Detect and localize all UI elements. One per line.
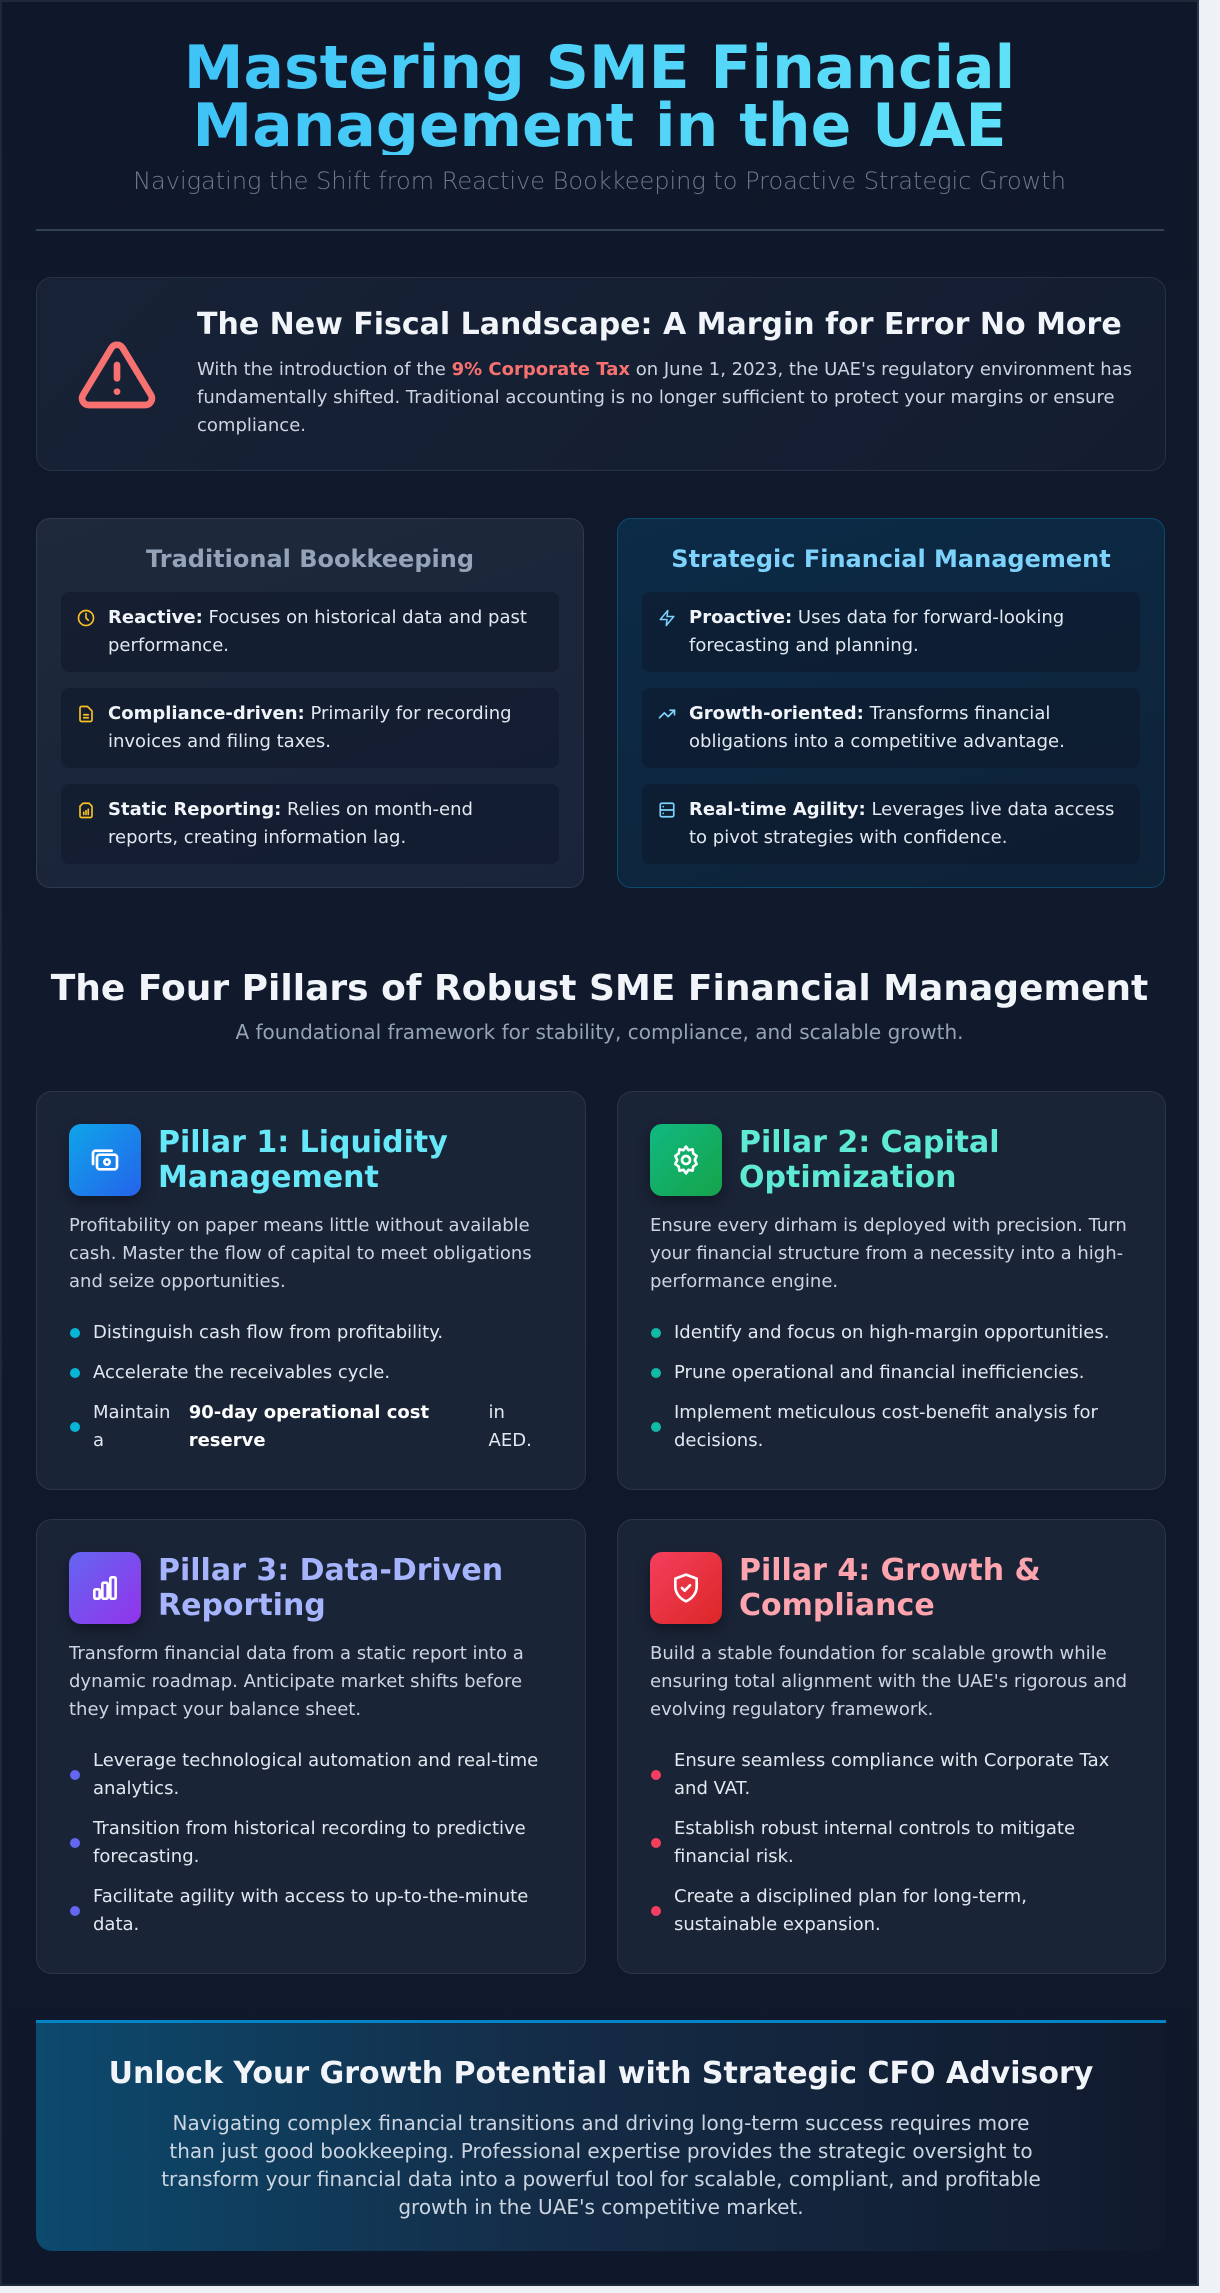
icon: warning triangle — [78, 342, 156, 408]
pillar 2 header — [648, 1124, 1000, 1204]
bullets: growth: Ensure seamless compliance with Corporate Tax and VAT. — [674, 1750, 1109, 1799]
title: Mastering SME Financial — [184, 33, 1015, 103]
subheading: framework: A foundational framework for stability, compliance, and scalable growth. — [235, 1020, 964, 1044]
item: real-time agility — [642, 784, 1140, 864]
icon: shield check — [650, 1552, 722, 1624]
bullets: liquidity: in AED. — [489, 1402, 532, 1451]
pillar 2 header: Optimization — [739, 1160, 956, 1195]
bullets: capital — [651, 1322, 1109, 1451]
bullets: reporting: Leverage technological automation and real-time analytics. — [93, 1750, 538, 1799]
item: static reporting: Static Reporting: Relies on month-end reports, creating information lag. — [108, 799, 473, 848]
icon: bar chart — [69, 1552, 141, 1624]
pillar 2 header: Pillar 2: Capital — [739, 1125, 1000, 1160]
panel: strategic financial management — [617, 518, 1165, 888]
item: real-time agility: Real-time Agility: Leverages live data access to pivot strategies with confidence. — [689, 799, 1114, 848]
bullets: growth: Establish robust internal controls to mitigate financial risk. — [674, 1818, 1075, 1867]
bullets: growth — [651, 1750, 1109, 1935]
pillar 4 header — [648, 1552, 1041, 1632]
text: liquidity description: Profitability on paper means little without available cash. Master the flow of capital to meet obligations and seize opportunities. — [69, 1215, 532, 1292]
pillar 3 header — [68, 1552, 503, 1632]
bullets: reporting: Transition from historical recording to predictive forecasting. — [93, 1818, 526, 1867]
bullets: capital: Prune operational and financial inefficiencies. — [674, 1362, 1084, 1383]
panel: pillar 4 growth — [617, 1519, 1166, 1974]
panel: new fiscal landscape alert — [36, 277, 1166, 471]
panel: pillar 1 liquidity — [36, 1091, 586, 1490]
heading: strategic: Strategic Financial Management — [671, 545, 1111, 573]
heading: cta: Unlock Your Growth Potential with Strategic CFO Advisory — [109, 2056, 1093, 2091]
text: growth description: Build a stable foundation for scalable growth while ensuring total alignment with the UAE's rigorous and evolving regulatory framework. — [650, 1643, 1127, 1720]
pillar 1 header: Pillar 1: Liquidity — [158, 1125, 448, 1160]
subtitle: Navigating the Shift from Reactive Bookkeeping to Proactive Strategic Growth — [133, 167, 1066, 195]
panel: pillar 3 reporting — [36, 1519, 586, 1974]
panel: pillar 2 capital — [617, 1091, 1166, 1490]
text: corporate tax: With the introduction of the 9% Corporate Tax on June 1, 2023, the UAE's regulatory environment has fundamentally shifted. Traditional accounting is no longer sufficient to protect your margins or ensure compliance. — [197, 359, 1132, 436]
text: capital description: Ensure every dirham is deployed with precision. Turn your financial structure from a necessity into a high-performance engine. — [650, 1215, 1127, 1292]
item: proactive — [642, 592, 1140, 672]
text: cta body: Navigating complex financial transitions and driving long-term success requires more than just good bookkeeping. Professional expertise provides the strategic oversight to transform your financial data into a powerful tool for scalable, compliant, and profitable growth in the UAE's competitive market. — [161, 2111, 1041, 2219]
bullets: capital: Identify and focus on high-margin opportunities. — [674, 1322, 1109, 1343]
pillar 4 header: Pillar 4: Growth & — [739, 1553, 1041, 1588]
item: compliance-driven: Compliance-driven: Primarily for recording invoices and filing taxes. — [108, 703, 512, 752]
heading: fiscal landscape: The New Fiscal Landscape: A Margin for Error No More — [197, 307, 1122, 342]
bullets: liquidity: 90-day operational cost reserve — [189, 1402, 429, 1451]
bullets: capital: Implement meticulous cost-benefit analysis for decisions. — [674, 1402, 1098, 1451]
item: compliance-driven — [61, 688, 559, 768]
icon: wallet — [69, 1124, 141, 1196]
bullets: growth: Create a disciplined plan for long-term, sustainable expansion. — [674, 1886, 1027, 1935]
title: Management in the UAE — [192, 91, 1006, 161]
pillar 4 header: Compliance — [739, 1588, 935, 1623]
item: growth-oriented — [642, 688, 1140, 768]
item: proactive: Proactive: Uses data for forward-looking forecasting and planning. — [689, 607, 1064, 656]
bullets: liquidity — [70, 1322, 532, 1451]
title — [2, 39, 1197, 155]
item: reactive — [61, 592, 559, 672]
panel: traditional bookkeeping — [36, 518, 584, 888]
bullets: reporting — [70, 1750, 538, 1935]
bullets: reporting: Facilitate agility with access to up-to-the-minute data. — [93, 1886, 528, 1935]
bullets: liquidity: Distinguish cash flow from profitability. — [93, 1322, 443, 1343]
item: static reporting — [61, 784, 559, 864]
heading: traditional: Traditional Bookkeeping — [146, 545, 474, 573]
icon: gear — [650, 1124, 722, 1196]
callout: CFO advisory — [36, 2020, 1166, 2251]
pillar 3 header: Pillar 3: Data-Driven — [158, 1553, 503, 1588]
text: reporting description: Transform financial data from a static report into a dynamic roadmap. Anticipate market shifts before they impact your balance sheet. — [69, 1643, 524, 1720]
pillar 1 header — [68, 1124, 448, 1204]
bullets: liquidity: Accelerate the receivables cycle. — [93, 1362, 390, 1383]
bullets: liquidity: Maintain a — [93, 1402, 170, 1451]
heading: four pillars: The Four Pillars of Robust SME Financial Management — [51, 968, 1148, 1009]
pillar 1 header: Management — [158, 1160, 379, 1195]
pillar 3 header: Reporting — [158, 1588, 326, 1623]
item: reactive: Reactive: Focuses on historical data and past performance. — [108, 607, 527, 656]
item: growth-oriented: Growth-oriented: Transforms financial obligations into a competitive advantage. — [689, 703, 1065, 752]
